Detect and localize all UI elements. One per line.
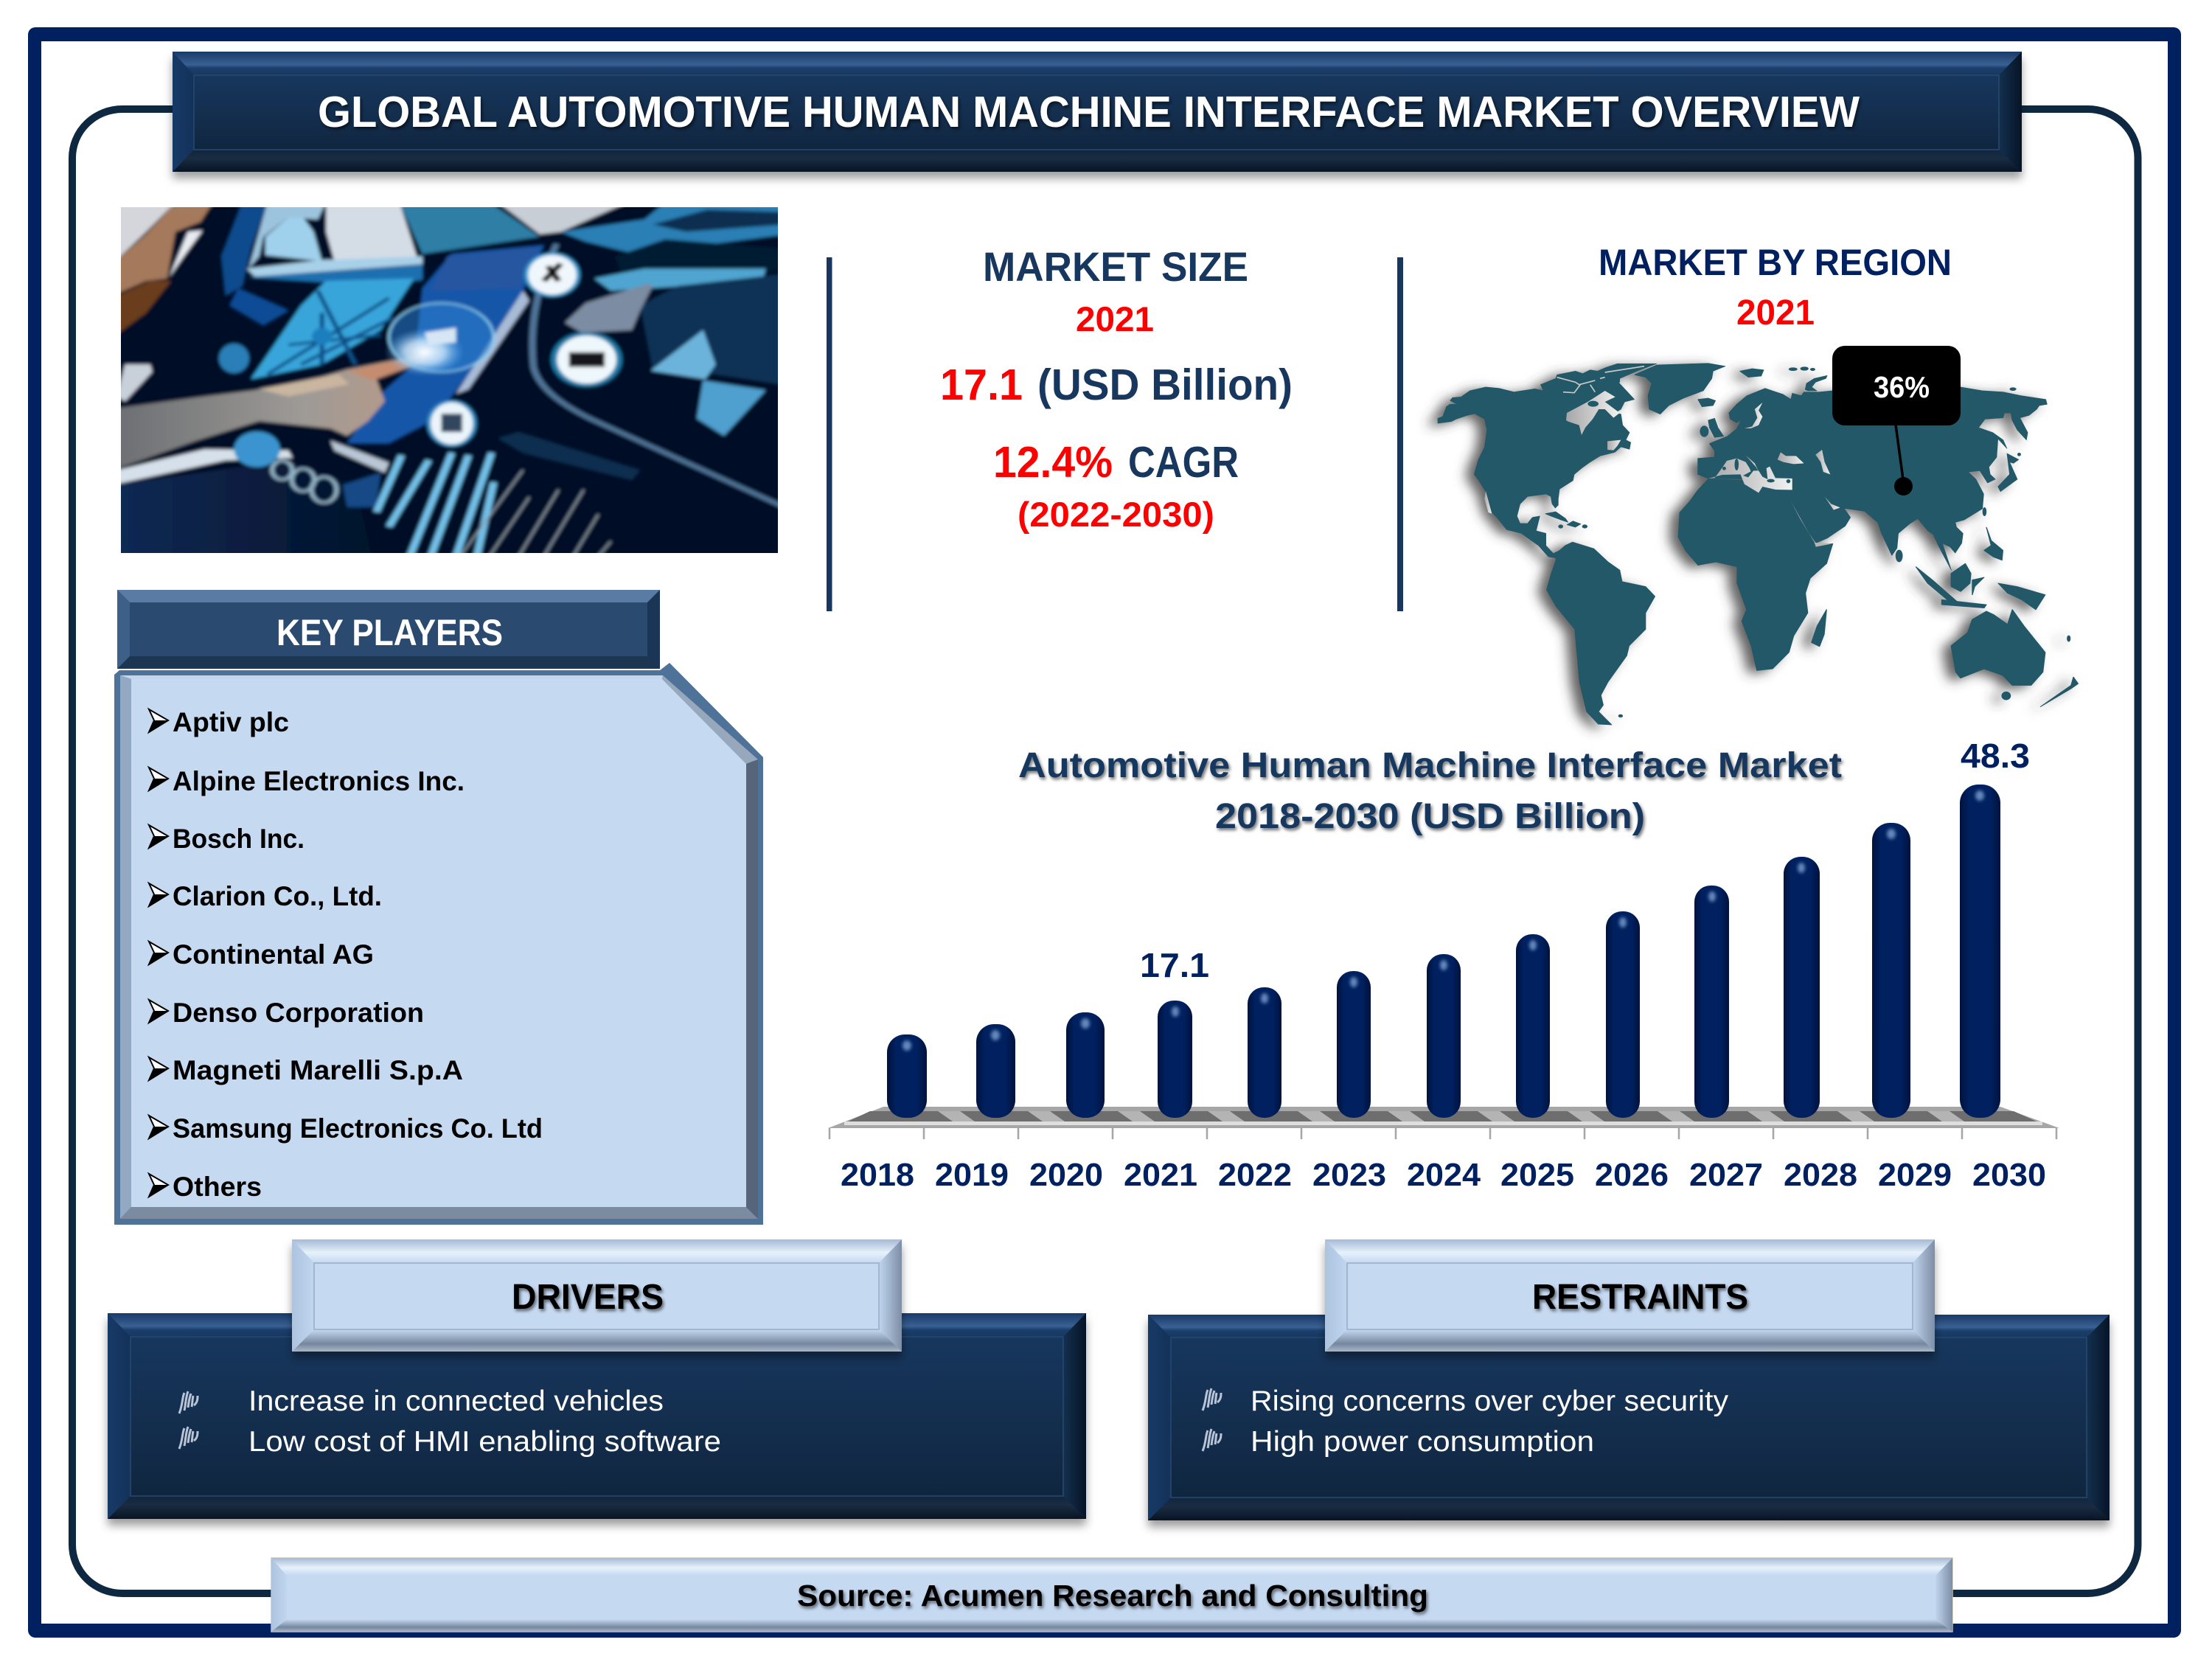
list item: Aptiv plc: Aptiv plc xyxy=(173,707,289,737)
bar highlights xyxy=(902,790,1984,1051)
panel: key players xyxy=(114,590,763,1225)
market by region heading: MARKET BY REGION xyxy=(1599,242,1952,283)
year labels: 2019 xyxy=(935,1157,1009,1193)
year labels: 2026 xyxy=(1595,1157,1669,1193)
chart title: 2018-2030 (USD Billion) xyxy=(1215,797,1645,836)
drivers heading: DRIVERS xyxy=(512,1278,664,1317)
restraints heading xyxy=(1325,1239,1935,1352)
drivers heading xyxy=(292,1239,902,1352)
world map xyxy=(1438,364,2078,725)
list item: Others: Others xyxy=(173,1172,262,1202)
source bar xyxy=(271,1558,1952,1632)
divider left of market by region xyxy=(1397,257,1403,611)
market size block: 17.1 xyxy=(940,361,1023,409)
source text: Source: Acumen Research and Consulting xyxy=(797,1579,1428,1613)
year labels: 2028 xyxy=(1784,1157,1857,1193)
list item: Clarion Co., Ltd.: Clarion Co., Ltd. xyxy=(173,881,382,911)
year labels: 2018 xyxy=(841,1157,914,1193)
panel: restraints xyxy=(1148,1239,2110,1520)
key players heading: KEY PLAYERS xyxy=(276,612,503,653)
market size block: 12.4% xyxy=(993,438,1113,487)
year labels: 2029 xyxy=(1878,1157,1952,1193)
callout: 36% Asia-Pacific share xyxy=(1832,346,1961,495)
year labels: 2024 xyxy=(1407,1157,1481,1193)
key players list box xyxy=(114,663,763,1225)
chart title xyxy=(1018,746,1842,836)
market size block: (2022-2030) xyxy=(1018,495,1214,534)
x-axis ticks xyxy=(830,1128,2056,1139)
chart title: Automotive Human Machine Interface Market xyxy=(1018,746,1842,785)
year labels xyxy=(841,1157,2046,1193)
year labels: 2020 xyxy=(1029,1157,1103,1193)
market size block: 2021 xyxy=(1076,299,1154,338)
year labels: 2027 xyxy=(1689,1157,1763,1193)
bars xyxy=(887,785,2000,1118)
restraint item 2: High power consumption xyxy=(1251,1426,1594,1458)
driver item 1: Increase in connected vehicles xyxy=(248,1385,664,1417)
list item: Continental AG: Continental AG xyxy=(173,939,374,970)
list item: Bosch Inc.: Bosch Inc. xyxy=(173,824,305,854)
value label 2021: 17.1 xyxy=(1140,946,1209,984)
list item: Samsung Electronics Co. Ltd: Samsung Electronics Co. Ltd xyxy=(173,1113,543,1144)
callout: 36% Asia-Pacific share: 36% xyxy=(1874,370,1930,404)
panel: drivers xyxy=(108,1239,1086,1519)
market size block xyxy=(940,243,1293,534)
driver item 2: Low cost of HMI enabling software xyxy=(248,1426,721,1458)
list item: Magneti Marelli S.p.A: Magneti Marelli S.p.A xyxy=(173,1055,463,1085)
year labels: 2025 xyxy=(1500,1157,1574,1193)
icon: restraint bullet 1 xyxy=(1203,1388,1221,1411)
icon: restraint bullet 2 xyxy=(1203,1429,1221,1451)
photo: hand touching car dashboard interface xyxy=(113,202,787,559)
market by region heading: 2021 xyxy=(1736,293,1815,333)
market size block: MARKET SIZE xyxy=(983,243,1248,290)
icon: driver bullet 2 xyxy=(179,1427,198,1449)
icon: driver bullet 1 xyxy=(179,1391,198,1413)
year labels: 2021 xyxy=(1124,1157,1197,1193)
year labels: 2030 xyxy=(1972,1157,2046,1193)
key players heading xyxy=(117,590,660,669)
year labels: 2022 xyxy=(1218,1157,1292,1193)
market by region heading xyxy=(1599,242,1952,333)
year labels: 2023 xyxy=(1312,1157,1386,1193)
list item: Denso Corporation: Denso Corporation xyxy=(173,998,424,1028)
market size block: CAGR xyxy=(1128,438,1239,487)
chart floor xyxy=(828,1107,2059,1128)
restraints body xyxy=(1148,1315,2110,1520)
drivers body xyxy=(108,1313,1086,1519)
market size block: (USD Billion) xyxy=(1037,361,1293,409)
bar chart xyxy=(828,737,2059,1193)
list item: Alpine Electronics Inc.: Alpine Electronics Inc. xyxy=(173,766,465,796)
title banner xyxy=(173,52,2022,172)
inland seas on the map xyxy=(1484,366,1840,547)
title text: GLOBAL AUTOMOTIVE HUMAN MACHINE INTERFACE MARKET OVERVIEW xyxy=(318,88,1860,136)
divider left of market size xyxy=(827,257,832,611)
restraint item 1: Rising concerns over cyber security xyxy=(1251,1385,1729,1417)
key players list xyxy=(149,707,543,1202)
value label 2030: 48.3 xyxy=(1961,737,2030,775)
restraints heading: RESTRAINTS xyxy=(1532,1278,1748,1317)
